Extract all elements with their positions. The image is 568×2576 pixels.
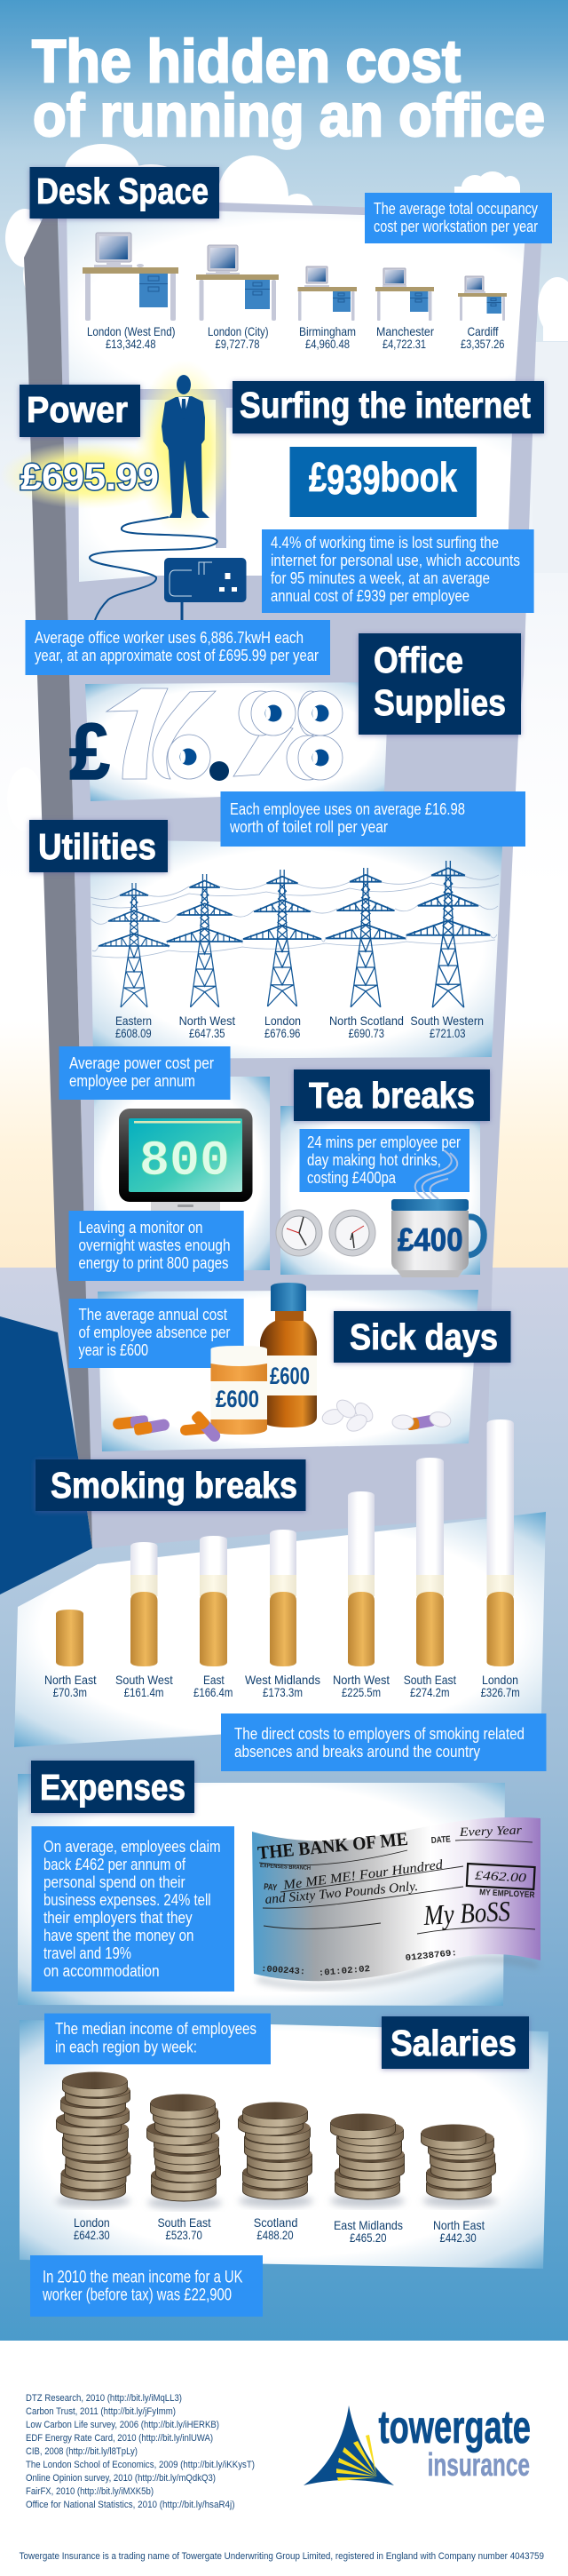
amount box: [467, 1864, 535, 1889]
callout: sick days: The average annual cost: [78, 1306, 227, 1324]
panel: expenses: [18, 1774, 505, 2006]
main building lavender: [58, 197, 543, 1548]
references: [26, 2393, 255, 2510]
icon: mug: £400: [398, 1221, 463, 1258]
logo: £939book: [289, 447, 477, 517]
icon: cheque: PAY: [264, 1882, 278, 1893]
callout: expenses: On average, employees claim: [43, 1838, 221, 1856]
smoking labels: South East: [404, 1673, 456, 1687]
smoking labels: £326.7m: [481, 1685, 520, 1699]
callout: tea: day making hot drinks,: [307, 1151, 441, 1169]
references: Carbon Trust, 2011 (http://bit.ly/jFyImm): [26, 2406, 176, 2417]
logo: £939book: book: [381, 454, 457, 500]
pylon labels: £608.09: [115, 1026, 152, 1040]
signature: My BoSS: [422, 1895, 511, 1931]
callout: power cost: [59, 1046, 231, 1100]
heading: smoking breaks: [36, 1459, 305, 1511]
references: The London School of Economics, 2009 (http://bit.ly/iKKysT): [26, 2460, 255, 2470]
desk labels: £4,960.48: [305, 337, 350, 351]
callout: office supplies: [220, 791, 525, 847]
lower-left dark blue building: [0, 1316, 92, 1594]
callout: sick days: of employee absence per: [78, 1324, 231, 1341]
callout: surfing: annual cost of £939 per employee: [271, 587, 469, 605]
smoking labels: North East: [44, 1673, 97, 1687]
smoking labels: £173.3m: [263, 1685, 303, 1699]
coin labels: £488.20: [256, 2228, 294, 2242]
icon: cheque: [252, 1817, 540, 1986]
panel: monitor window: [94, 1077, 270, 1270]
bar: London: [486, 1419, 514, 1666]
references: DTZ Research, 2010 (http://bit.ly/iMqLL3): [26, 2393, 182, 2404]
amount box: £462.00: [475, 1869, 526, 1886]
cable: [90, 517, 217, 620]
heading: expenses: [31, 1761, 194, 1813]
smoking labels: South West: [115, 1673, 173, 1687]
coin stack: London: [56, 2071, 130, 2207]
logo: towergate insurance: [304, 2402, 531, 2485]
callout: smoking: absences and breaks around the country: [234, 1743, 480, 1761]
panel: office supplies window: [85, 682, 389, 801]
coins chart: [56, 2071, 497, 2245]
callout: monitor: energy to print 800 pages: [78, 1254, 229, 1272]
icon: cheque: 01238769:: [405, 1949, 458, 1964]
callout: power cost: Average power cost per: [69, 1054, 214, 1072]
coin labels: North East: [433, 2218, 485, 2232]
coin labels: [74, 2215, 485, 2245]
icon: medicine bottle: £600: [270, 1363, 310, 1389]
heading: utilities: Utilities: [38, 826, 156, 867]
callout: expenses: have spent the money on: [43, 1927, 193, 1944]
icon: cheque: Every Year: [458, 1825, 523, 1840]
callout: surfing: 4.4% of working time is lost surfing the: [271, 534, 499, 552]
coin labels: £523.70: [165, 2228, 202, 2242]
callout: expenses: personal spend on their: [43, 1873, 185, 1891]
bar: North West: [348, 1491, 375, 1666]
desk 3: [298, 266, 357, 321]
pylon: Eastern: [99, 883, 170, 1007]
title: The hidden cost: [32, 28, 461, 95]
callout: surfing: internet for personal use, which accounts: [271, 552, 520, 569]
callout: monitor: overnight wastes enough: [78, 1236, 231, 1254]
digit 6: [153, 691, 216, 779]
callout: monitor: [69, 1211, 244, 1281]
coin labels: South East: [158, 2215, 211, 2230]
desk labels: Manchester: [376, 324, 434, 338]
pylon labels: North Scotland: [329, 1014, 404, 1028]
smoking labels: [44, 1673, 520, 1699]
bar: East: [200, 1536, 227, 1666]
callout: tea: [300, 1129, 469, 1192]
icon: cheque: :000243:: [261, 1965, 305, 1977]
title: [32, 28, 545, 149]
digit 9: [233, 691, 296, 776]
heading: surfing the internet: Surfing the internet: [240, 385, 531, 425]
callout: surfing: for 95 minutes a week, at an average: [271, 569, 490, 587]
pylon labels: [115, 1014, 484, 1040]
desk 1: [83, 233, 178, 321]
coin labels: £642.30: [74, 2228, 110, 2242]
logo: £939book: £: [309, 454, 332, 500]
building grey wall: [24, 219, 92, 1548]
desk 2: [196, 245, 279, 321]
digit 8: [287, 691, 343, 780]
icon: mug: [391, 1199, 484, 1277]
callout: surfing: [262, 529, 534, 613]
desk labels: [87, 324, 505, 351]
pylon labels: £676.96: [264, 1026, 301, 1040]
icon: businessman: [162, 375, 209, 518]
callout: expenses: [32, 1826, 234, 1992]
clouds: [5, 144, 568, 831]
callout: power: year, at an approximate cost of £695.99 per year: [35, 647, 319, 664]
pylon: South Western: [406, 861, 490, 1007]
footer panel: [0, 2341, 568, 2576]
callout: expenses: travel and 19%: [43, 1944, 131, 1962]
callout: power: Average office worker uses 6,886.7kwH each: [35, 629, 304, 647]
icon: cheque: :01:02:02: [318, 1965, 371, 1979]
bar: South West: [130, 1542, 158, 1666]
desk labels: £4,722.31: [383, 337, 426, 351]
pylon labels: £647.35: [189, 1026, 225, 1040]
pylon labels: £690.73: [349, 1026, 384, 1040]
icon: cheque: DATE: [430, 1834, 451, 1846]
callout: expenses: on accommodation: [43, 1962, 160, 1980]
icon: medicine bottle: [260, 1283, 317, 1427]
callout: expenses: business expenses. 24% tell: [43, 1891, 211, 1909]
callout: expenses: back £462 per annum of: [43, 1856, 186, 1873]
bar: North East: [56, 1610, 83, 1666]
smoking chart: cigarettes: [44, 1419, 520, 1699]
smoking labels: London: [482, 1673, 518, 1687]
callout: smoking: [221, 1713, 547, 1771]
pylon: London: [243, 870, 321, 1006]
heading: sick days: Sick days: [350, 1316, 498, 1357]
callout: power: [25, 620, 330, 675]
panel: sick days window: [98, 1290, 478, 1451]
heading: power: Power: [27, 389, 128, 430]
smoking labels: West Midlands: [245, 1673, 320, 1687]
power glow: [0, 360, 233, 537]
callout: sick days: [69, 1299, 244, 1368]
pylon labels: £721.03: [430, 1026, 466, 1040]
references: Low Carbon Life survey, 2006 (http://bit.ly/iHERKB): [26, 2420, 219, 2430]
background ground: [0, 1268, 568, 2341]
panel: power and surfing window: [78, 400, 513, 582]
heading: office supplies: Office: [374, 640, 463, 680]
desk labels: London (City): [208, 324, 268, 338]
smoking labels: £274.2m: [410, 1685, 449, 1699]
callout: median income: [44, 2014, 271, 2064]
callout: monitor: Leaving a monitor on: [78, 1219, 202, 1236]
desk labels: Birmingham: [299, 324, 356, 338]
heading: tea breaks: Tea breaks: [309, 1075, 475, 1116]
window mullion: [216, 389, 226, 548]
smoking labels: £166.4m: [193, 1685, 233, 1699]
panel: tea window: [280, 1106, 480, 1275]
pylon: North West: [167, 874, 242, 1007]
smoking labels: £161.4m: [124, 1685, 163, 1699]
icon: cheque: EXPENSES BRANCH: [260, 1863, 311, 1872]
coin labels: East Midlands: [334, 2218, 403, 2232]
icon: plug socket: [164, 558, 247, 621]
icon: cheque: Me ME ME! Four Hundred: [281, 1857, 445, 1893]
panel: desk window: [67, 207, 526, 389]
heading: office supplies: Supplies: [374, 682, 506, 723]
callout: tea: costing £400pa: [307, 1169, 397, 1187]
coin labels: £465.20: [350, 2230, 387, 2245]
cheque rules: [259, 1840, 535, 1934]
pound sign: £: [69, 708, 110, 797]
stat: £695.99: £695.99: [20, 456, 159, 497]
panel: smoking: [14, 1512, 546, 1747]
coin labels: London: [74, 2215, 110, 2230]
callout: mean income: [30, 2255, 263, 2317]
bank name: THE BANK OF ME: [256, 1828, 409, 1864]
heading: expenses: Expenses: [40, 1767, 185, 1808]
coin labels: Scotland: [254, 2215, 298, 2230]
references: Office for National Statistics, 2010 (http://bit.ly/hsaR4j): [26, 2500, 234, 2510]
cheque paper: [252, 1817, 540, 1981]
logo: £939book: 939: [327, 457, 381, 503]
desk 5: [458, 276, 507, 321]
callout: office supplies: Each employee uses on average £16.98: [230, 800, 465, 818]
pylon labels: South Western: [410, 1014, 484, 1028]
icon: pills: [112, 1396, 453, 1444]
callout: median income: The median income of employees: [55, 2020, 256, 2038]
icon: monitor showing 800: [119, 1109, 252, 1214]
logo rays: [336, 2435, 376, 2481]
icon: cheque: MY EMPLOYER: [479, 1888, 535, 1900]
desk 4: [375, 268, 434, 321]
callout: desk space: [365, 193, 552, 243]
callout: median income: in each region by week:: [55, 2039, 197, 2056]
icon: monitor showing 800: 800: [139, 1133, 230, 1189]
desk labels: £13,342.48: [106, 337, 156, 351]
decimal point: [209, 761, 229, 781]
coin stack: North East: [421, 2125, 497, 2207]
heading: smoking breaks: Smoking breaks: [51, 1465, 297, 1506]
smoking labels: North West: [333, 1673, 390, 1687]
callout: mean income: worker (before tax) was £22,900: [42, 2286, 232, 2304]
pylon: North Scotland: [326, 868, 406, 1007]
icon: clock 1: [276, 1210, 322, 1256]
heading: desk space: Desk Space: [36, 171, 209, 211]
callout: power cost: employee per annum: [69, 1072, 195, 1090]
references: FairFX, 2010 (http://bit.ly/iMXK5b): [26, 2486, 154, 2497]
desk chart: [83, 233, 507, 351]
distant building: [532, 342, 568, 573]
icon: pill jar: [211, 1346, 267, 1435]
coin labels: £442.30: [440, 2230, 477, 2245]
icon: clock 2: [329, 1210, 375, 1256]
callout: smoking: The direct costs to employers of smoking related: [234, 1725, 525, 1743]
callout: mean income: In 2010 the mean income for a UK: [43, 2269, 243, 2286]
desk labels: £9,727.78: [215, 337, 260, 351]
callout: tea: 24 mins per employee per: [307, 1133, 461, 1151]
coin stack: Scotland: [238, 2102, 313, 2207]
coin stack: South East: [147, 2095, 222, 2209]
smoking labels: East: [203, 1673, 225, 1687]
references: EDF Energy Rate Card, 2010 (http://bit.ly/inlUWA): [26, 2433, 213, 2444]
logo triangle: [304, 2405, 394, 2485]
references: Online Opinion survey, 2010 (http://bit.ly/mQdkQ3): [26, 2473, 216, 2484]
callout: sick days: year is £600: [78, 1341, 148, 1359]
pylon labels: North West: [179, 1014, 235, 1028]
desk labels: £3,357.26: [461, 337, 505, 351]
digit 1: [106, 688, 168, 779]
cheque shadow: [257, 1960, 538, 1986]
panel: utilities window: [90, 839, 502, 1059]
pylon labels: Eastern: [115, 1014, 152, 1028]
bar: West Midlands: [270, 1530, 296, 1666]
coin stack: East Midlands: [330, 2114, 405, 2207]
callout: expenses: their employers that they: [43, 1909, 193, 1927]
pylon labels: London: [264, 1014, 301, 1028]
desk labels: London (West End): [87, 324, 176, 338]
panel: salaries: [20, 2020, 548, 2269]
icon: cheque: and Sixty Two Pounds Only.: [264, 1880, 419, 1907]
utilities chart: pylons: [91, 861, 499, 1040]
references: CIB, 2008 (http://bit.ly/l8TpLy): [26, 2446, 138, 2457]
icon: steam: [415, 1150, 457, 1199]
heading: salaries: Salaries: [390, 2023, 517, 2063]
bar: South East: [416, 1458, 444, 1666]
icon: pill jar: £600: [216, 1386, 259, 1412]
callout: office supplies: worth of toilet roll per year: [229, 818, 388, 836]
desk labels: Cardiff: [467, 324, 499, 338]
smoking labels: £225.5m: [342, 1685, 381, 1699]
heading: office supplies: [359, 633, 521, 735]
smoking labels: £70.3m: [53, 1685, 87, 1699]
background sky: [0, 0, 568, 1268]
toilet roll figure: £16.98: [69, 688, 343, 797]
power lines: [91, 875, 499, 958]
